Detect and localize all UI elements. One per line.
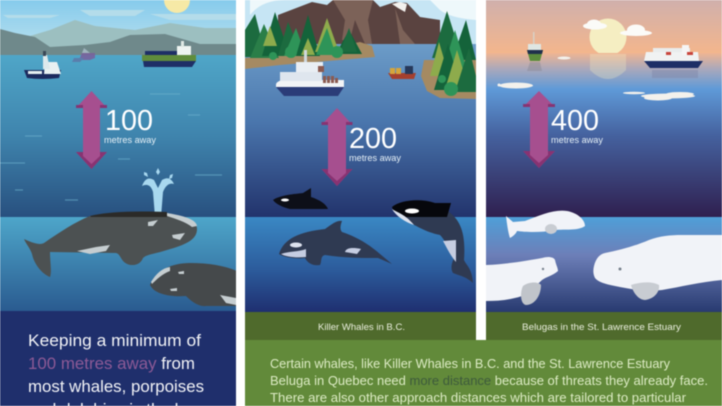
- panel: more distance text: [245, 340, 722, 406]
- boat: cargo ship: [142, 41, 196, 67]
- boat: fishing vessel: [24, 51, 61, 79]
- boat: green ship: [527, 32, 543, 71]
- paragraph: There are also other approach distances which are tailored to particular: [270, 390, 687, 405]
- message text: 100 metres away from: [28, 355, 195, 373]
- ferry: [276, 50, 344, 96]
- distant mountains: [0, 20, 236, 55]
- label: 100 metres away: metres away: [104, 135, 156, 145]
- right shore: [421, 60, 476, 99]
- panel: 200 metres: [245, 0, 480, 340]
- water below surface: [486, 217, 722, 312]
- label: 200 metres away: 200: [349, 123, 397, 155]
- trees: right: [430, 11, 480, 96]
- message text: most whales, porpoises: [28, 378, 204, 396]
- orca: breaching: [392, 200, 473, 283]
- paragraph: Certain whales, like Killer Whales in B.C. and the St. Lawrence Estuary: [270, 356, 670, 371]
- arrow: 200 metres: [322, 108, 352, 186]
- ice floes: [498, 56, 695, 100]
- water ripples: [0, 94, 222, 200]
- message text: [28, 332, 204, 406]
- sky and sun: [0, 0, 237, 36]
- caption bar: killer whales: Killer Whales in B.C.: [318, 322, 405, 333]
- orca: swimming: [279, 221, 392, 265]
- message text: Keeping a minimum of: [28, 332, 201, 350]
- caption bar: killer whales: [245, 312, 476, 340]
- water below surface: [245, 217, 476, 312]
- sky: [244, 0, 476, 44]
- whale: calf: [150, 263, 237, 306]
- water below surface: [0, 217, 236, 311]
- label: 100 metres away: 100: [105, 105, 153, 137]
- caption bar: belugas: Belugas in the St. Lawrence Estuary: [522, 322, 681, 333]
- sunset sky: [486, 0, 722, 54]
- water upper: [245, 44, 476, 217]
- boat: cruise ship: [644, 45, 703, 78]
- paragraph: Beluga in Quebec need more distance because of threats they already face.: [270, 373, 708, 388]
- mountain: [278, 0, 440, 44]
- arrow: 400 metres: [523, 91, 555, 168]
- orca: distant: [273, 188, 328, 209]
- label: 400 metres away: metres away: [551, 135, 603, 145]
- label: 200 metres away: metres away: [349, 153, 401, 163]
- paragraph: [270, 356, 708, 405]
- whale: right whale: [24, 211, 197, 277]
- panel: 100 metres: [0, 0, 237, 406]
- panel: 400 metres: [486, 0, 722, 340]
- trees: left: [245, 12, 362, 60]
- boat: distant: [72, 48, 95, 62]
- panel: message: [0, 311, 236, 406]
- arrow: 100 metres: [76, 91, 107, 169]
- caption bar: belugas: [486, 312, 722, 340]
- beluga: large: [593, 235, 722, 300]
- clouds: [250, 0, 476, 20]
- water surface: [0, 55, 236, 217]
- beluga: small: [506, 211, 585, 238]
- left shore: [245, 42, 375, 69]
- sun: [590, 18, 626, 56]
- water: [486, 53, 722, 217]
- label: 400 metres away: 400: [551, 105, 599, 137]
- beluga: left: [486, 257, 558, 305]
- whale spout: [142, 168, 174, 217]
- sun reflection: [590, 54, 626, 79]
- small boat: [388, 66, 416, 79]
- clouds: [583, 20, 652, 36]
